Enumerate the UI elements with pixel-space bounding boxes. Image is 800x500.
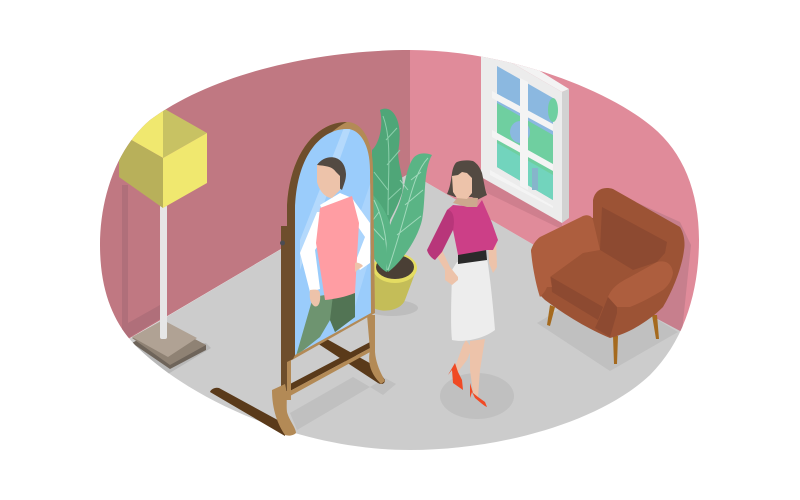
- lamp pole: [160, 205, 167, 339]
- man right arm: [300, 212, 327, 292]
- chair arm front: [595, 297, 617, 337]
- left post: [280, 226, 291, 400]
- woman right forearm: [488, 238, 497, 273]
- pot: [372, 268, 417, 311]
- right wall: [410, 50, 699, 330]
- chair floor shadow: [538, 310, 678, 370]
- woman back leg: [456, 340, 470, 372]
- woman sleeve: [427, 210, 454, 260]
- woman blouse: [447, 200, 498, 255]
- chair seat: [550, 250, 633, 307]
- mirror: [210, 120, 385, 436]
- back leaf: [372, 109, 403, 272]
- lamp shade: [119, 108, 207, 208]
- front foot: [210, 388, 285, 436]
- woman floor shadow: [440, 373, 514, 419]
- chair back inset: [600, 207, 667, 270]
- man collar: [320, 193, 352, 215]
- right leaf: [386, 153, 432, 272]
- woman face: [452, 172, 472, 199]
- window: [481, 40, 569, 228]
- chair seat front: [551, 277, 603, 320]
- man left arm: [350, 198, 370, 270]
- left leaf: [374, 196, 390, 272]
- floor lamp: [119, 108, 211, 374]
- woman belt: [458, 249, 487, 264]
- woman hair: [447, 160, 487, 200]
- front post curve: [272, 384, 296, 436]
- pot shadow: [374, 301, 418, 316]
- lamp shadow on wall: [122, 185, 160, 342]
- woman shoes: [448, 363, 487, 407]
- mirror glass with reflection: [290, 120, 380, 360]
- chair right arm: [608, 261, 673, 307]
- man hand: [310, 290, 320, 306]
- window glass: [497, 66, 558, 200]
- crossbar: [290, 341, 372, 396]
- woman front leg: [470, 339, 485, 397]
- window side: [562, 89, 569, 223]
- chair legs: [547, 305, 659, 364]
- room scene clipped to blob: [90, 40, 710, 460]
- window mullions: [497, 79, 553, 186]
- mirror frame: [287, 122, 375, 362]
- left wall: [100, 50, 410, 338]
- floor: [130, 175, 681, 450]
- chair body: [531, 188, 685, 338]
- woman neck: [453, 197, 478, 207]
- window shadow: [481, 177, 562, 228]
- plant: [366, 109, 432, 316]
- right post: [367, 315, 385, 384]
- isometric room illustration: [100, 50, 699, 450]
- chair left arm: [531, 215, 600, 297]
- man trousers: [296, 290, 355, 356]
- mirror floor shadow: [290, 377, 396, 430]
- lamp base: [132, 320, 211, 374]
- chair wall shadow: [638, 203, 691, 332]
- back foot: [317, 338, 385, 384]
- woman: [427, 160, 514, 419]
- man head: [317, 157, 346, 198]
- woman left forearm: [433, 250, 458, 285]
- armchair: [531, 188, 691, 371]
- woman skirt: [451, 258, 495, 341]
- man vest: [316, 196, 359, 300]
- window top: [512, 63, 569, 92]
- window frame: [481, 45, 562, 223]
